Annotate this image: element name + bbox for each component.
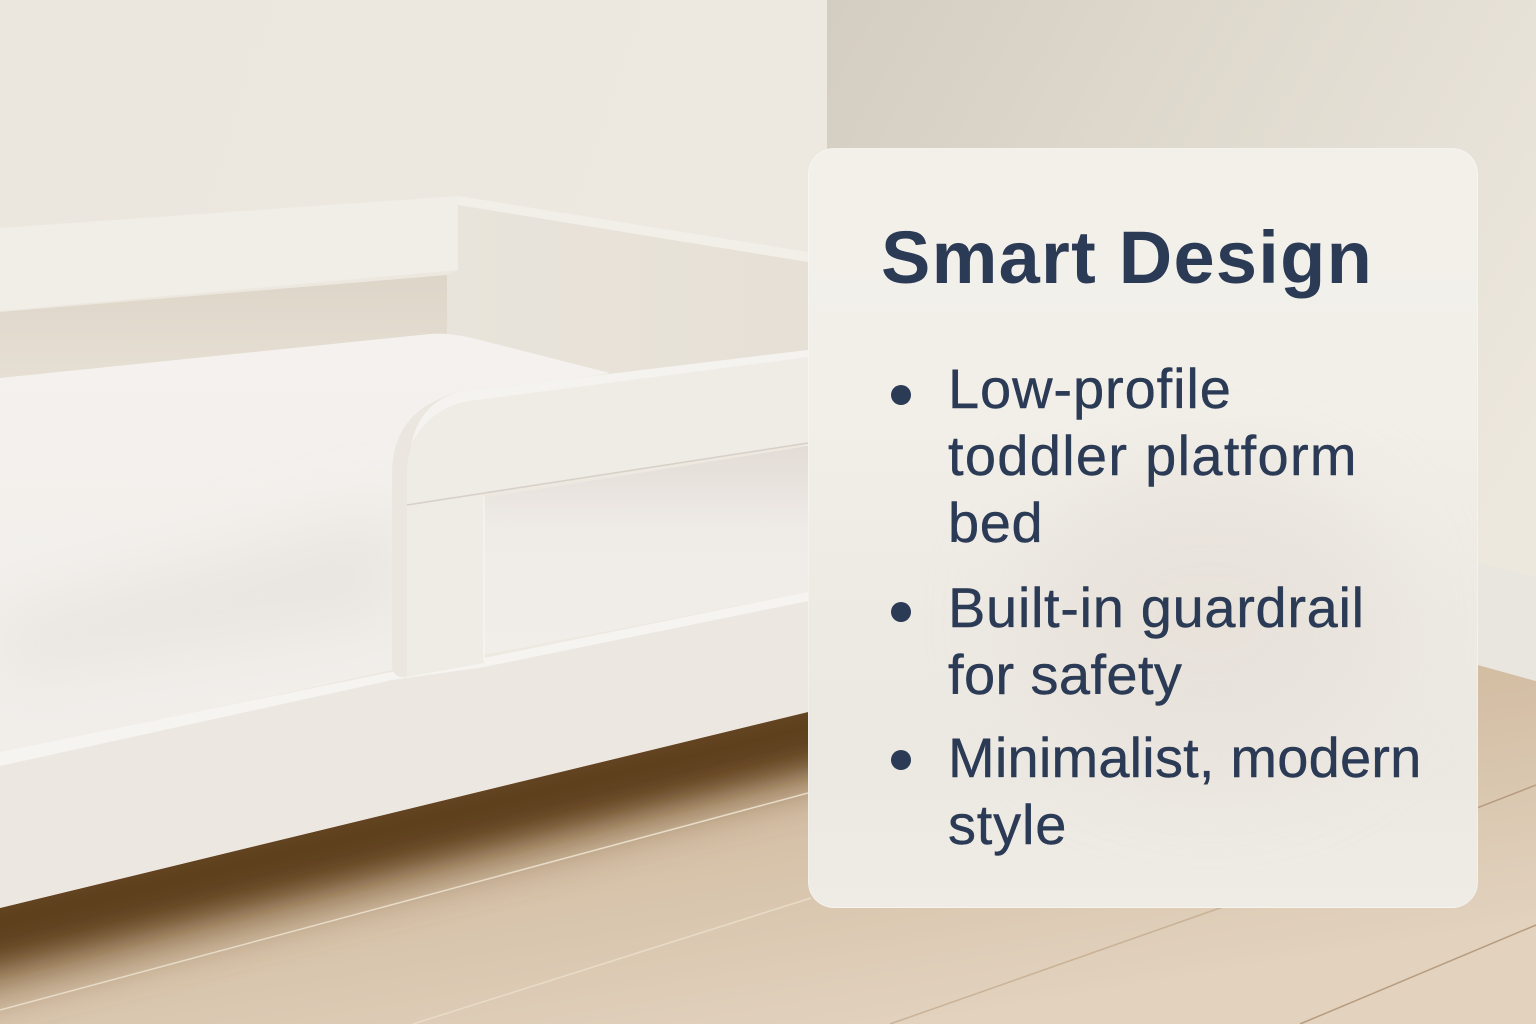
- panel: smart design card: [808, 148, 1478, 908]
- mattress soft shading: [52, 538, 382, 648]
- mattress through rail opening: [484, 446, 808, 655]
- bullet text 2: Built-in guardrail: [948, 576, 1365, 639]
- side wall: [827, 0, 1536, 760]
- head board rail: [0, 196, 808, 374]
- guardrail: [392, 350, 808, 677]
- bullet text 3: [948, 726, 1422, 856]
- wall band under head rail: [0, 275, 447, 378]
- bullet text 2: for safety: [948, 643, 1182, 706]
- baseboard: [1478, 563, 1536, 681]
- bullet text 1: Low-profile: [948, 357, 1232, 420]
- bullet icon 1: [891, 385, 911, 405]
- floor planks: [0, 785, 1536, 1024]
- bullet text 3: style: [948, 793, 1067, 856]
- floor: [0, 600, 1536, 1024]
- bullet text 1: bed: [948, 491, 1043, 554]
- floor shadow under bed: [0, 712, 808, 1018]
- bullet text 1: toddler platform: [948, 424, 1358, 487]
- bullet text 2: [948, 576, 1365, 706]
- bullet icon 3: [891, 750, 911, 770]
- guardrail post: [392, 494, 484, 677]
- back wall: [0, 0, 827, 760]
- bullet list: [891, 357, 1422, 856]
- bullet icon 2: [891, 602, 911, 622]
- guardrail top rail: [392, 350, 808, 505]
- heading: Smart Design: [881, 216, 1373, 299]
- bullet text 1: [948, 357, 1358, 554]
- mattress: [0, 334, 610, 755]
- bed side frame: [0, 592, 808, 908]
- bullet text 3: Minimalist, modern: [948, 726, 1422, 789]
